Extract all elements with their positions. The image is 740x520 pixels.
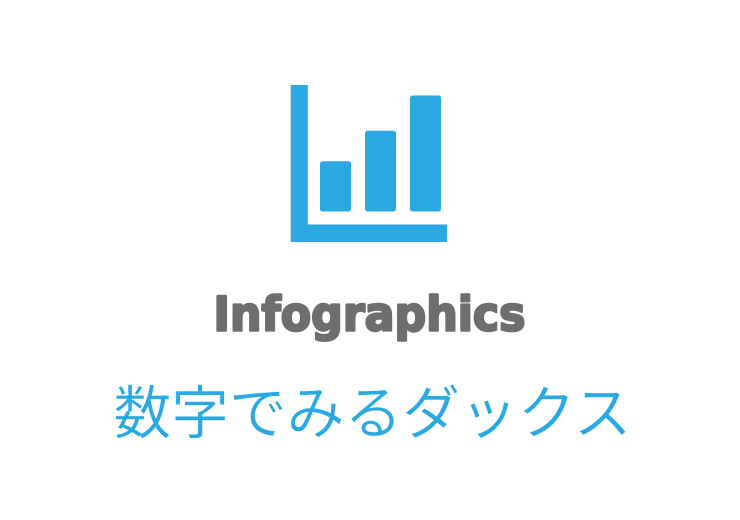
bar: short — [320, 161, 351, 212]
icon: bar chart — [291, 85, 447, 242]
subtitle: 数字でみるダックス: 数字でみるダックス — [114, 382, 632, 446]
bar: tall — [410, 96, 441, 212]
heading: Infographics: Infographics — [214, 288, 526, 342]
bar: medium — [365, 131, 396, 212]
chart axes — [291, 85, 447, 242]
